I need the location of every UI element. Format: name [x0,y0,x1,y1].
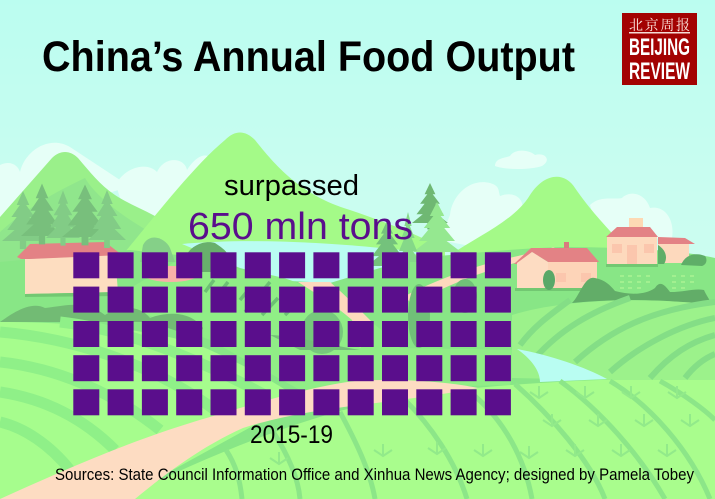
garden plots [620,275,694,289]
unit grid: purple squares [73,252,511,415]
house: left [17,242,122,297]
road segment behind grid [298,282,372,348]
house: centre [514,242,599,291]
title: China’s Annual Food Output [42,33,575,81]
left tree cluster [2,184,126,249]
label: surpassed: surpassed [224,170,359,202]
lower right field [120,380,715,499]
logo: Beijing Review [622,13,697,85]
mountain: centre [125,132,445,280]
mountains [0,132,618,280]
lower road [0,380,478,499]
clouds [0,143,673,250]
mountain: right [450,177,618,270]
grass streaks [205,280,292,315]
logo: Beijing Review: 北京周报 [629,15,690,35]
centre trees [301,183,477,354]
middle meadow [0,247,715,499]
upper road [405,247,555,305]
mountain: left [0,152,190,280]
hedge: right [572,278,712,305]
lake [182,241,420,283]
foreground meadow centre [110,262,520,390]
hedge: centre band [270,335,360,350]
river [517,349,607,382]
house: upper right [606,218,706,267]
pink flower bed [143,266,199,282]
left striped field [0,322,300,499]
bushes [140,238,229,272]
mountain: left shaded ridge [0,178,150,280]
right striped field [512,298,715,382]
label: 650 mln tons: 650 mln tons [188,206,413,248]
label: 2015-19: 2015-19 [250,421,333,449]
hedge: left [0,305,203,338]
